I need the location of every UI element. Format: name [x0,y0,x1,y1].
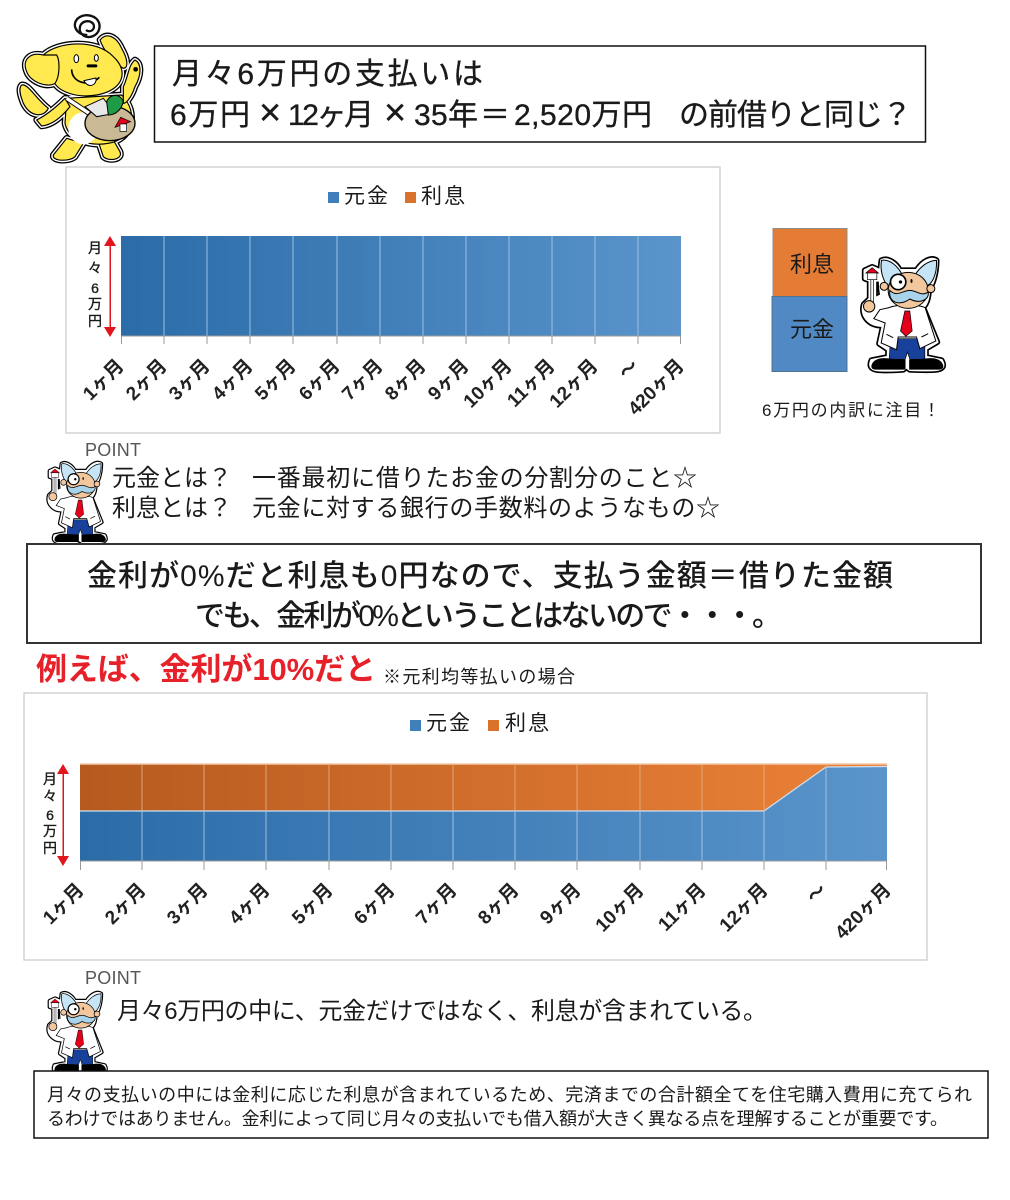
x axis labels: 3ヶ月 [165,356,215,405]
area: principal [121,236,681,336]
block: principal: 元金 [790,317,834,342]
x axis labels: 1ヶ月 [39,880,89,929]
legend: chart 1: 利息 [421,185,465,208]
block: principal [772,296,847,372]
x axis labels: 7ヶ月 [338,356,388,405]
x axis labels: 2ヶ月 [101,880,151,929]
point 1 text [112,465,720,522]
x axis labels: 1ヶ月 [79,356,129,405]
x axis labels: 5ヶ月 [288,880,338,929]
x axis labels: 9ヶ月 [536,880,586,929]
x axis labels: 8ヶ月 [474,880,524,929]
point 1 text: 元金とは？ [112,465,232,492]
x axis labels: 420ヶ月 [831,880,896,944]
x axis labels: 5ヶ月 [251,356,301,405]
summary box: るわけではありません。金利によって同じ月々の支払いでも借入額が大きく異なる点を理解することが重要です。 [47,1109,948,1129]
x axis labels: ～ [615,356,644,384]
title line 2: 2,520万円 [514,99,652,132]
legend: chart 2 [410,712,549,735]
panel: chart 2 monthly payment at 10 percent [24,693,927,960]
x axis labels: 420ヶ月 [624,356,689,420]
icon: professor point 2 [48,993,106,1073]
arrow: height of payment [104,236,116,337]
title box [154,46,926,142]
axis label: monthly 60,000 yen [88,240,102,329]
axis label: monthly 60,000 yen: 6 [46,807,54,823]
breakdown stack [772,228,847,372]
x axis labels: 9ヶ月 [424,356,474,405]
legend: chart 1 [328,185,465,208]
x axis labels: 10ヶ月 [592,880,649,936]
callout: zero percent interest [27,544,981,643]
axis label: monthly 60,000 yen: 円 [88,313,102,329]
x axis labels: 3ヶ月 [163,880,213,929]
title line 2: 12ヶ月 [288,99,374,132]
x axis labels: 7ヶ月 [412,880,462,929]
axis label: monthly 60,000 yen: 々 [43,788,57,804]
title line 2: 6万円 [170,99,250,132]
x axis labels: 10ヶ月 [460,356,517,412]
icon: professor large [863,259,943,370]
title line 2: × [384,92,406,134]
title line 2: の前借りと同じ？ [679,99,912,132]
x axis labels: 4ヶ月 [208,356,258,405]
title line 2: × [259,92,281,134]
x axis labels: 12ヶ月 [716,880,773,936]
callout: zero percent interest: 金利が0%だと利息も0円なので、支払う金額＝借りた金額 [87,560,893,593]
axis label: monthly 60,000 yen: 々 [88,260,102,276]
title line 2: 35年 [414,99,478,132]
point 1 text: 一番最初に借りたお金の分割分のこと☆ [252,465,697,492]
summary box: 月々の支払いの中には金利に応じた利息が含まれているため、完済までの合計額全てを住宅購入費用に充てられ [47,1085,972,1105]
point 1 text: 利息とは？ [112,495,232,522]
x axis labels: 8ヶ月 [381,356,431,405]
axis label: monthly 60,000 yen: 万 [43,823,57,839]
point 2 label: POINT [85,968,141,988]
x axis labels: 2ヶ月 [122,356,172,405]
x axis labels [79,356,689,420]
x axis labels: 12ヶ月 [546,356,603,412]
axis label: monthly 60,000 yen: 月 [43,771,57,787]
x axis labels: 6ヶ月 [295,356,345,405]
title line 2 [170,92,912,134]
panel: chart 1 monthly payment all principal [66,167,720,433]
point 1 label: POINT [85,440,141,460]
arrow: height of payment [57,764,69,866]
title line 1: 月々6万円の支払いは [172,58,483,91]
point 2 text: 月々6万円の中に、元金だけではなく、利息が含まれている。 [117,998,767,1025]
note: equal repayment: ※元利均等払いの場合 [383,667,575,687]
legend: chart 1: 元金 [344,185,388,208]
point 1 text: 元金に対する銀行の手数料のようなもの☆ [252,495,720,522]
block: interest [773,228,847,296]
title line 2: ＝ [480,99,510,132]
x axis labels: 11ヶ月 [655,880,711,936]
x axis labels: 11ヶ月 [504,356,560,412]
axis label: monthly 60,000 yen: 月 [88,240,102,256]
legend: chart 2: 元金 [426,712,470,735]
axis label: monthly 60,000 yen: 万 [88,296,102,312]
area: interest [80,764,887,811]
area: principal [80,766,887,861]
icon: professor point 1 [48,463,106,543]
summary box [34,1071,988,1138]
axis label: monthly 60,000 yen: 6 [91,280,99,296]
legend: chart 2: 利息 [505,712,549,735]
axis label: monthly 60,000 yen [43,771,57,856]
axis label: monthly 60,000 yen: 円 [43,840,57,856]
x axis labels [39,880,896,944]
x axis labels: ～ [803,880,832,908]
heading: 10 percent example: 例えば、金利が10%だと [36,652,376,687]
callout: zero percent interest: でも、金利が0%ということはないので・・・。 [195,600,782,633]
x axis labels: 4ヶ月 [225,880,275,929]
mascot: yellow dog with bag [20,15,140,160]
block: interest: 利息 [790,252,834,277]
caption: breakdown: 6万円の内訳に注目！ [762,401,940,420]
x axis labels: 6ヶ月 [350,880,400,929]
